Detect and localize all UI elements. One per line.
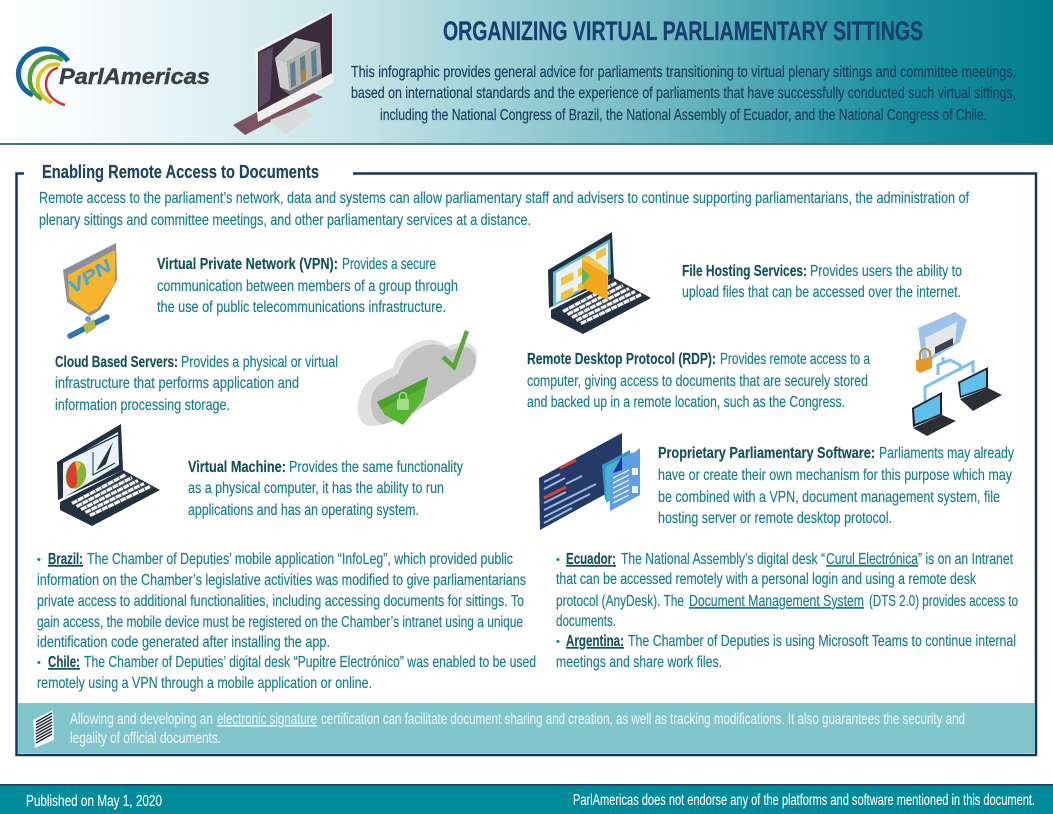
icon: laptop with charts	[57, 424, 160, 526]
icon: monitor with parliament building	[233, 10, 333, 135]
text: Brazil and Chile examples: •	[37, 657, 41, 669]
text: proprietary software: Proprietary Parliamentary Software:	[658, 445, 875, 462]
text: cloud based servers	[55, 354, 338, 414]
ParlAmericas logo: ParlAmericas	[59, 64, 210, 89]
footer bar: Published on May 1, 2020	[26, 793, 162, 810]
icon: code screen and documents	[539, 433, 640, 530]
callout band: electronic signature: legality of official documents.	[70, 730, 221, 747]
text: RDP: and backed up in a remote location, such as the Congress.	[527, 394, 845, 411]
text: Brazil and Chile examples: private access to additional functionalities, including accessing documents for sittings. To	[37, 593, 524, 610]
icon: VPN shield	[63, 243, 117, 336]
text: virtual machine: Virtual Machine:	[188, 459, 286, 476]
text: Brazil and Chile examples: remotely using a VPN through a mobile application or online.	[37, 675, 372, 692]
header banner	[0, 0, 1053, 145]
section intro	[39, 190, 969, 229]
text: cloud based servers: information processing storage.	[55, 397, 230, 414]
ParlAmericas logo	[18, 49, 210, 105]
text: Brazil and Chile examples: Chile:	[48, 654, 80, 671]
section heading: Enabling Remote Access to Documents	[42, 161, 319, 182]
text: Ecuador and Argentina examples: Ecuador:	[566, 551, 616, 568]
text: file hosting: Provides users the ability to	[810, 263, 962, 280]
icon: secure network with folder and laptops	[912, 312, 1002, 436]
text: virtual machine: as a physical computer, it has the ability to run	[188, 480, 444, 497]
text: Brazil and Chile examples	[37, 551, 536, 692]
text: proprietary software	[658, 445, 1014, 527]
text: Brazil and Chile examples: gain access, the mobile device must be registered on the Chamber’s intranet using a unique	[37, 614, 523, 631]
intro text	[351, 64, 1016, 124]
text: Ecuador and Argentina examples: Curul Electrónica	[826, 551, 918, 568]
text: Brazil and Chile examples: information on the Chamber’s legislative activities was modified to give parliamentarians	[37, 572, 526, 589]
text: VPN	[157, 256, 458, 316]
text: cloud based servers: Cloud Based Servers:	[55, 354, 178, 371]
icon: laptop with folder	[548, 232, 651, 334]
text: RDP: computer, giving access to documents that are securely stored	[527, 373, 868, 390]
text: cloud based servers: Provides a physical or virtual	[181, 354, 338, 371]
text: Ecuador and Argentina examples: meetings and share work files.	[556, 654, 722, 671]
text: virtual machine: applications and has an operating system.	[188, 502, 419, 519]
text: Ecuador and Argentina examples: •	[556, 636, 560, 648]
text: file hosting: upload files that can be accessed over the internet.	[682, 284, 961, 301]
text: VPN: Virtual Private Network (VPN):	[157, 256, 338, 273]
icon: cloud with shield and check	[358, 331, 477, 426]
text: Ecuador and Argentina examples: Document Management System	[689, 593, 864, 610]
text: VPN: communication between members of a group through	[157, 278, 458, 295]
section intro: plenary sittings and committee meetings, and other parliamentary services at a distance.	[39, 212, 531, 229]
text: Brazil and Chile examples: The Chamber of Deputies’ digital desk “Pupitre Electrónico” was enabled to be used	[84, 654, 536, 671]
text: proprietary software: hosting server or remote desktop protocol.	[658, 510, 892, 527]
text: VPN: Provides a secure	[342, 256, 436, 273]
text: virtual machine	[188, 459, 463, 519]
text: Brazil and Chile examples: Brazil:	[48, 551, 83, 568]
text: Ecuador and Argentina examples: protocol (AnyDesk). The	[556, 593, 684, 610]
text: proprietary software: Parliaments may already	[879, 445, 1014, 462]
text: Ecuador and Argentina examples	[556, 551, 1018, 671]
text: file hosting	[682, 263, 962, 301]
text: file hosting: File Hosting Services:	[682, 263, 807, 280]
footer bar	[0, 784, 1053, 814]
text: Ecuador and Argentina examples: ” is on an Intranet	[918, 551, 1013, 568]
text: virtual machine: Provides the same functionality	[289, 459, 463, 476]
icon: VPN shield: VPN	[65, 255, 116, 297]
text: Ecuador and Argentina examples: •	[556, 554, 560, 566]
callout band: electronic signature: electronic signature	[217, 711, 317, 728]
text: Ecuador and Argentina examples: documents.	[556, 613, 616, 630]
text: Ecuador and Argentina examples: The National Assembly’s digital desk “	[621, 551, 825, 568]
callout band: electronic signature: Allowing and developing an	[70, 711, 213, 728]
callout band: electronic signature	[18, 703, 1035, 753]
section frame	[16, 174, 1036, 755]
icon: signed document	[33, 710, 54, 748]
text: cloud based servers: infrastructure that performs application and	[55, 375, 299, 392]
text: Ecuador and Argentina examples: Argentina:	[566, 633, 624, 650]
text: Brazil and Chile examples: The Chamber of Deputies’ mobile application “InfoLeg”, which provided public	[87, 551, 513, 568]
text: RDP: Provides remote access to a	[720, 351, 870, 368]
text: Brazil and Chile examples: identification code generated after installing the app.	[37, 634, 330, 651]
text: RDP	[527, 351, 870, 411]
text: Brazil and Chile examples: •	[37, 554, 41, 566]
text: VPN: the use of public telecommunications infrastructure.	[157, 299, 446, 316]
text: RDP: Remote Desktop Protocol (RDP):	[527, 351, 716, 368]
